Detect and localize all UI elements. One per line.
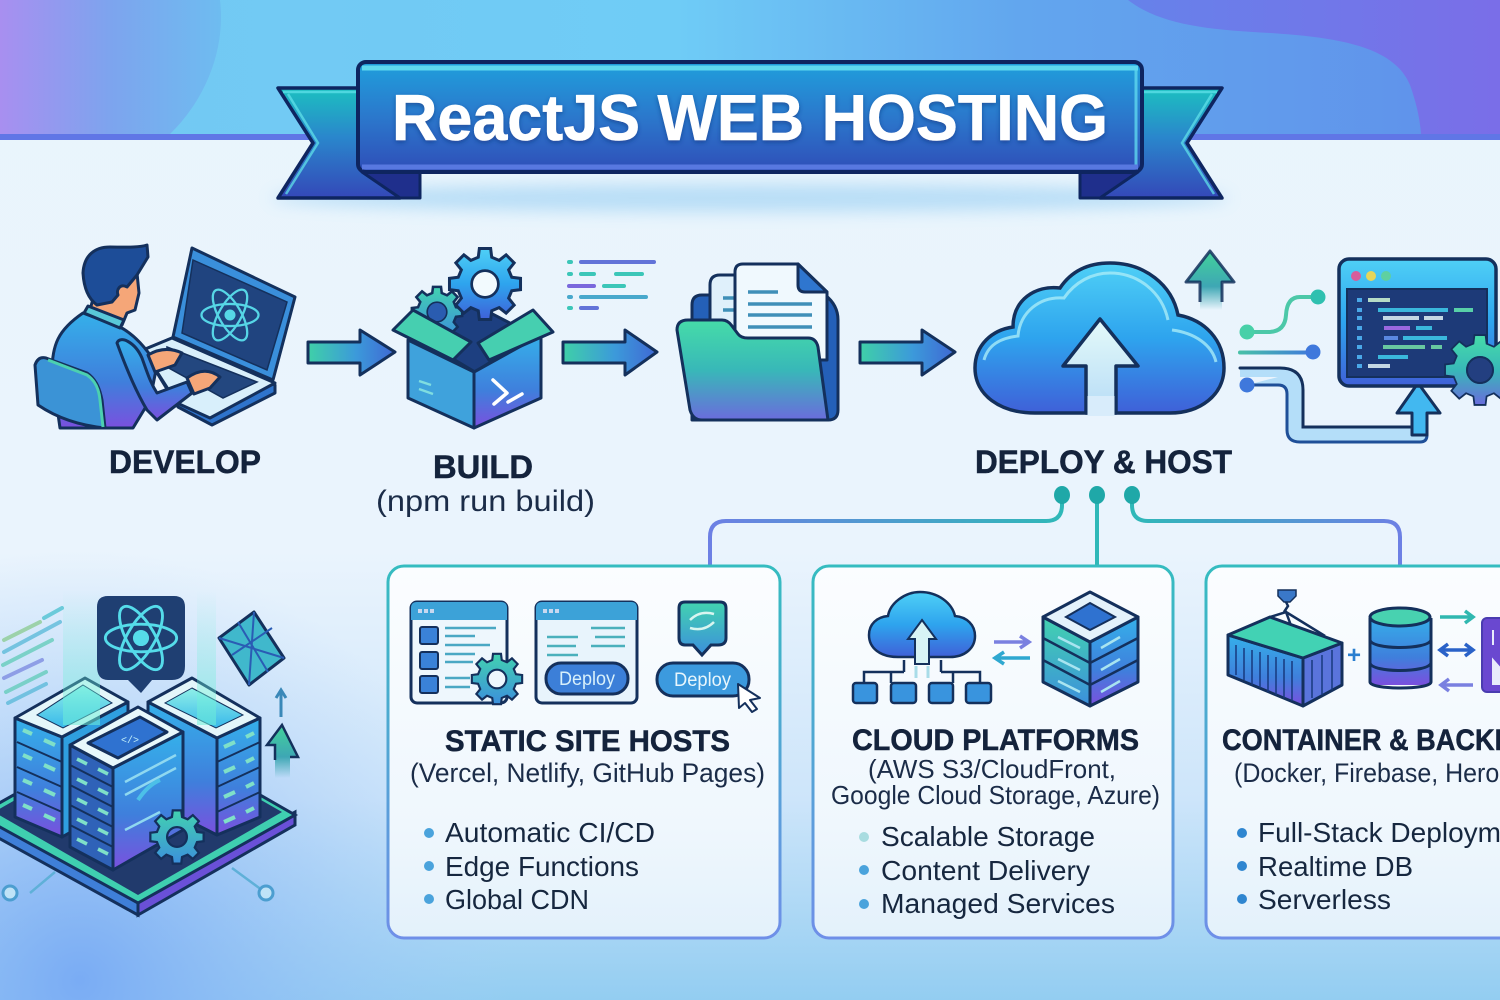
feature list: Realtime DB [1258,851,1413,882]
chair [35,358,105,428]
person torso [52,313,157,428]
neck and face [90,262,139,325]
connector lines to browser [1240,290,1440,442]
feature list [859,821,1115,919]
arrow: build to output [563,330,657,375]
icon: database [1370,608,1431,688]
title banner [278,62,1222,198]
icon: build folder [677,264,838,420]
right server tower [148,678,260,835]
large gear [449,248,521,320]
hands [148,349,182,372]
plus sign: + [1347,642,1361,669]
box left flap [393,310,471,360]
icon: isometric server cluster [0,590,298,915]
icon: server stack [1043,592,1138,706]
arrow: output to cloud [860,330,955,375]
icon: deploy button with cursor [657,663,760,712]
small gear [412,287,462,337]
panel: container and backend [1206,566,1500,938]
icon: deploy button with cursor: Deploy [674,670,731,691]
box right flap [478,310,553,360]
title text: ReactJS WEB HOSTING [392,81,1108,154]
subheading: Google Cloud Storage, Azure) [831,780,1160,810]
label: npm run build: (npm run build) [376,485,595,518]
connectors to hosting cards [710,486,1400,566]
subheading [831,754,1160,810]
arm [117,340,192,420]
label: deploy and host: DEPLOY & HOST [975,444,1232,480]
front server tower: </> [121,735,139,747]
feature list: Content Delivery [881,855,1090,886]
ribbon main panel [358,62,1142,172]
tube arrow [1240,368,1427,442]
icon: sync arrows [994,636,1030,664]
box inside [413,305,533,372]
left server tower [15,678,128,837]
front page with text [735,264,827,360]
floating tile [219,612,284,685]
react logo on screen [201,285,259,345]
platform [0,725,295,915]
rear page [710,275,745,340]
panel: cloud platforms [813,566,1173,938]
icon: shipping container [1228,590,1342,706]
label: build: BUILD [433,449,533,485]
glow beams [63,590,216,725]
feature list: Automatic CI/CD [445,817,655,848]
box right face [474,335,541,428]
terminal prompt [493,380,522,404]
icon: browser code window [1339,259,1500,405]
heading: CLOUD PLATFORMS [852,724,1139,757]
cloud shape [975,263,1224,413]
icon: build box with gears [393,248,553,428]
icon: cloud upload [975,263,1224,416]
icon: cloud network [853,592,991,703]
feature list [424,817,655,915]
feature list [1237,817,1500,915]
hair [83,245,148,305]
gear [1445,335,1500,405]
gear [150,810,204,864]
icon: window with deploy button [536,602,637,703]
folder front [677,320,828,420]
subheading: (Vercel, Netlify, GitHub Pages) [410,758,765,788]
icon: window with gear [411,602,522,704]
blue connector [1240,350,1313,354]
up arrows [267,690,298,778]
subheading: (AWS S3/CloudFront, [868,754,1116,784]
code lines: build output [569,262,654,308]
folder back [692,295,838,420]
feature list: Scalable Storage [881,821,1095,852]
icon: data arrows [1440,611,1473,691]
feature list: Edge Functions [445,851,639,882]
label: develop: DEVELOP [109,444,261,480]
icon: speech bubble [679,602,726,655]
icon: purple service box [1482,618,1500,692]
feature list: Global CDN [445,884,589,915]
icon: developer at laptop [35,245,295,428]
upload arrow [1063,319,1138,413]
code lines left [3,608,62,703]
laptop screen [173,248,295,380]
arrow: develop to build [308,330,395,375]
ribbon right tail [1100,88,1222,198]
arrow: up green [1186,251,1234,310]
icon: window with deploy button: Deploy [559,669,615,690]
feature list: Serverless [1258,884,1391,915]
green connector [1247,297,1318,332]
heading: STATIC SITE HOSTS [445,725,730,758]
ribbon left tail [278,88,400,198]
react bubble [97,596,185,693]
feature list: Managed Services [881,888,1115,919]
front server tower [70,707,204,870]
panel: static site hosts [388,566,780,938]
laptop base [143,338,275,425]
collar [84,306,124,328]
box left face [408,340,474,428]
